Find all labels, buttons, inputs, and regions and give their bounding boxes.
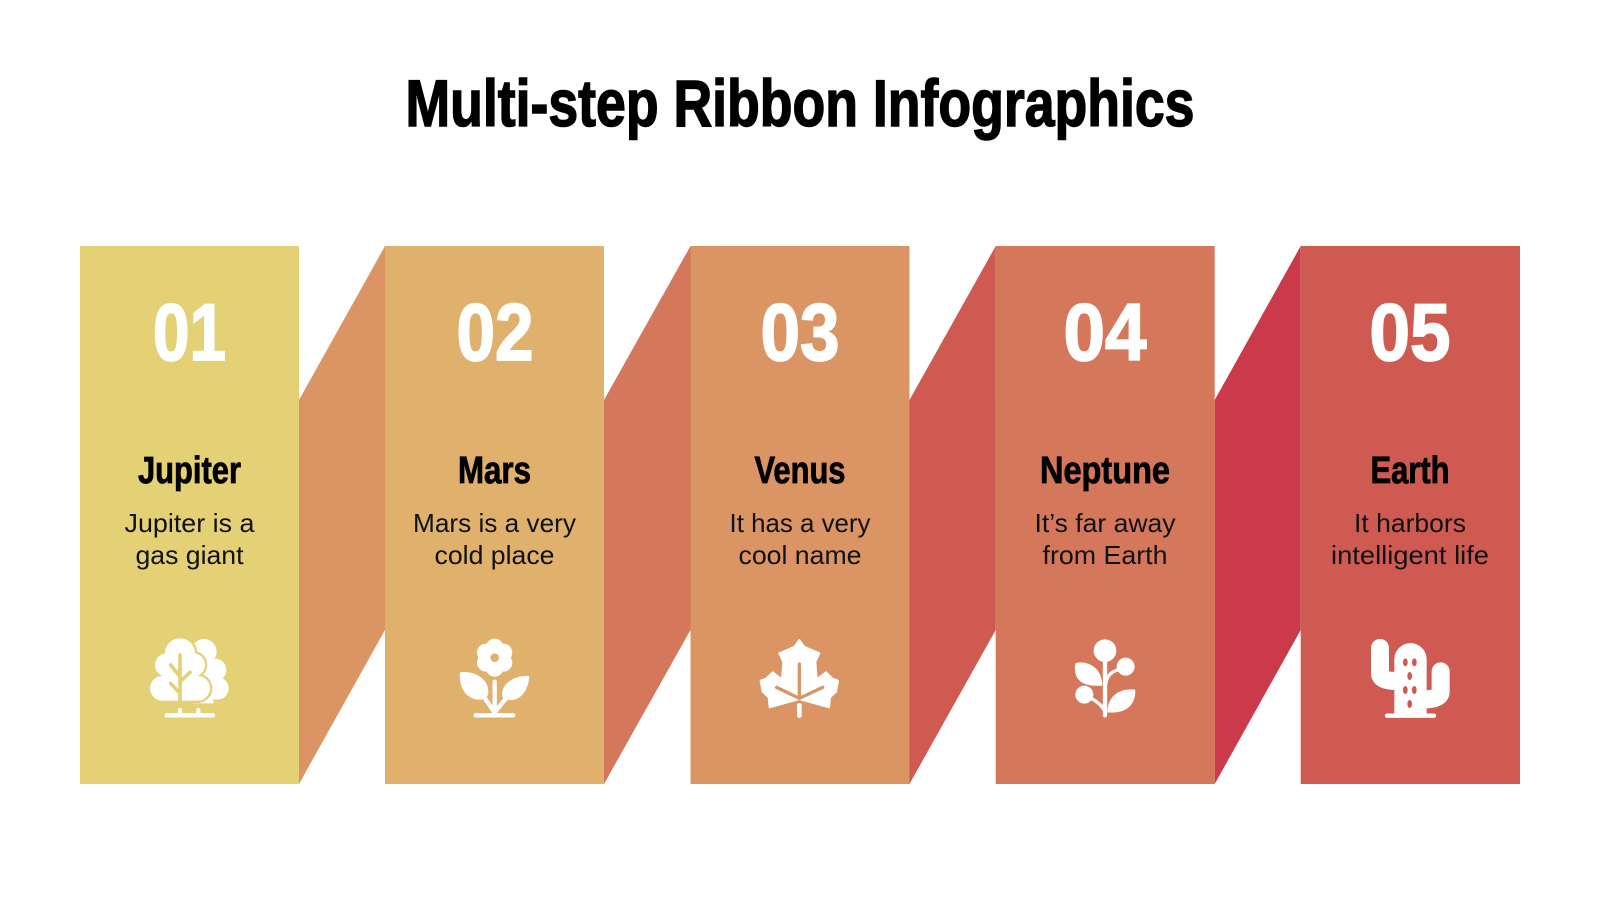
panel: step 05 Earth <box>1301 246 1520 784</box>
description Mars: cold place <box>434 540 554 570</box>
heading Neptune: Neptune <box>1040 450 1170 492</box>
number 02: 02 <box>456 288 534 378</box>
panel: step 04 Neptune <box>996 246 1215 784</box>
panel background 01 <box>80 246 299 784</box>
panel: step 03 Venus <box>690 246 910 784</box>
heading Jupiter: Jupiter <box>138 450 241 492</box>
ribbon fold 4 <box>1215 246 1301 784</box>
description Venus: cool name <box>738 540 862 570</box>
description Neptune <box>1034 508 1176 570</box>
description Neptune: It’s far away <box>1034 508 1176 538</box>
panel background 05 <box>1301 246 1520 784</box>
panel background 04 <box>996 246 1215 784</box>
number 04: 04 <box>1064 288 1146 378</box>
description Jupiter: gas giant <box>136 540 244 570</box>
description Jupiter <box>124 508 255 570</box>
number 05: 05 <box>1370 288 1450 378</box>
icon: flower <box>460 639 529 715</box>
description Earth <box>1331 508 1489 570</box>
description Jupiter: Jupiter is a <box>124 508 255 538</box>
heading Mars: Mars <box>458 450 531 492</box>
panel: step 01 Jupiter <box>80 246 299 784</box>
description Earth: intelligent life <box>1331 540 1489 570</box>
number 03: 03 <box>760 288 840 378</box>
title: Multi-step Ribbon Infographics <box>406 66 1194 140</box>
description Neptune: from Earth <box>1042 540 1168 570</box>
description Mars: Mars is a very <box>413 508 576 538</box>
panel background 02 <box>385 246 604 784</box>
heading Venus: Venus <box>754 450 846 492</box>
heading Earth: Earth <box>1370 450 1450 492</box>
ribbon fold 1 <box>299 246 385 784</box>
icon: berry branch <box>1075 639 1135 715</box>
icon: tree <box>150 638 229 715</box>
panel: step 02 Mars <box>385 246 604 784</box>
number 01: 01 <box>153 288 226 378</box>
description Earth: It harbors <box>1354 508 1466 538</box>
description Venus <box>730 508 870 570</box>
ribbon fold 2 <box>604 246 690 784</box>
icon: maple leaf <box>761 640 838 716</box>
ribbon fold 3 <box>910 246 996 784</box>
description Mars <box>413 508 576 570</box>
icon: cactus <box>1380 643 1441 716</box>
panel background 03 <box>690 246 910 784</box>
description Venus: It has a very <box>730 508 870 538</box>
